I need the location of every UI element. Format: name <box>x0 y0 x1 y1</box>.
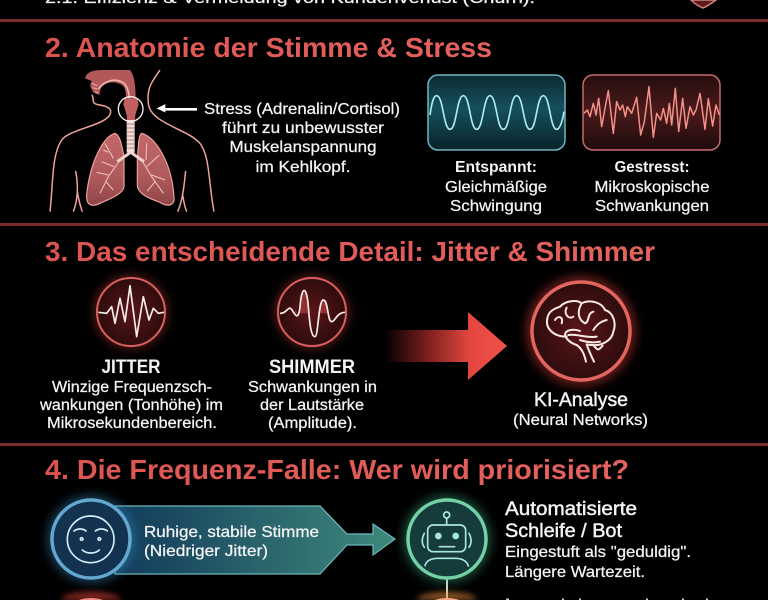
icon: brain <box>526 276 636 386</box>
label: calm voice: Ruhige, stabile Stimme <box>144 524 319 541</box>
text: stress explanation: im Kehlkopf. <box>256 159 350 176</box>
label: jitter: Mikrosekundenbereich. <box>47 415 217 432</box>
label: calm voice <box>144 524 319 560</box>
bronchi <box>97 143 165 193</box>
label: relaxed <box>445 159 547 215</box>
icon: stressed voice fragment <box>61 592 121 600</box>
label: stressed <box>594 159 710 215</box>
text: stress explanation <box>204 101 400 176</box>
label: relaxed: Entspannt: <box>455 159 537 176</box>
label: jitter: Winzige Frequenzsch- <box>52 379 212 396</box>
body outline <box>50 70 214 212</box>
label: bot outcome: Längere Wartezeit. <box>505 564 645 581</box>
panel: anatomy illustration <box>50 70 214 212</box>
connector: bot to agent <box>446 578 448 600</box>
label: jitter: JITTER <box>102 357 161 378</box>
label: bot outcome: Eingestuft als "geduldig". <box>505 544 691 561</box>
label: bot outcome: Automatisierte <box>505 499 637 520</box>
larynx <box>123 98 139 120</box>
label: jitter <box>39 357 223 432</box>
text: stress explanation: Muskelanspannung <box>230 139 376 156</box>
text: stress explanation: Stress (Adrenalin/Cortisol) <box>204 101 400 118</box>
trachea <box>127 120 135 153</box>
ring around larynx <box>118 97 143 121</box>
label: relaxed: Gleichmäßige <box>445 179 547 196</box>
divider 2 <box>0 223 768 226</box>
label: AI analysis <box>513 390 648 429</box>
label: shimmer: (Amplitude). <box>268 415 357 432</box>
left lung <box>87 133 124 205</box>
label: stressed: Schwankungen <box>595 198 709 215</box>
label: stressed: Gestresst: <box>614 159 690 176</box>
label: relaxed: Schwingung <box>450 198 542 215</box>
label: calm voice: (Niedriger Jitter) <box>144 543 268 560</box>
icon: human agent fragment <box>417 592 477 600</box>
right lung <box>137 133 174 205</box>
label: AI analysis: (Neural Networks) <box>513 412 648 429</box>
icon: shield fragment <box>691 0 716 8</box>
label: bot outcome: Schleife / Bot <box>505 521 623 542</box>
label: shimmer <box>248 357 377 432</box>
heading: section 3: 3. Das entscheidende Detail: Jitter & Shimmer <box>45 236 655 267</box>
text: stress explanation: führt zu unbewusster <box>222 120 385 137</box>
head and airway <box>85 70 136 98</box>
label: AI analysis: KI-Analyse <box>534 390 628 411</box>
arrow: to AI analysis <box>385 312 507 380</box>
label: shimmer: Schwankungen in <box>248 379 377 396</box>
arrow to larynx <box>157 105 197 112</box>
icon: calm face <box>47 495 135 583</box>
label: stressed: Mikroskopische <box>594 179 710 196</box>
label: shimmer: der Lautstärke <box>260 397 364 414</box>
heading: section 2: 2. Anatomie der Stimme & Stress <box>45 32 492 63</box>
label: bot outcome <box>505 499 691 581</box>
panel: stressed waveform <box>583 75 720 150</box>
icon: shimmer <box>275 275 349 349</box>
heading: section 4: 4. Die Frequenz-Falle: Wer wird priorisiert? <box>45 454 629 485</box>
icon: robot <box>403 495 491 583</box>
panel: calm voice banner <box>115 506 395 574</box>
cut-off text tops at the frame edge <box>506 598 708 600</box>
label: shimmer: SHIMMER <box>269 357 355 378</box>
label: jitter: wankungen (Tonhöhe) im <box>39 397 223 414</box>
icon: jitter <box>94 275 168 349</box>
divider 3 <box>0 443 768 446</box>
panel: relaxed waveform <box>428 75 565 150</box>
divider 1 <box>0 19 768 22</box>
